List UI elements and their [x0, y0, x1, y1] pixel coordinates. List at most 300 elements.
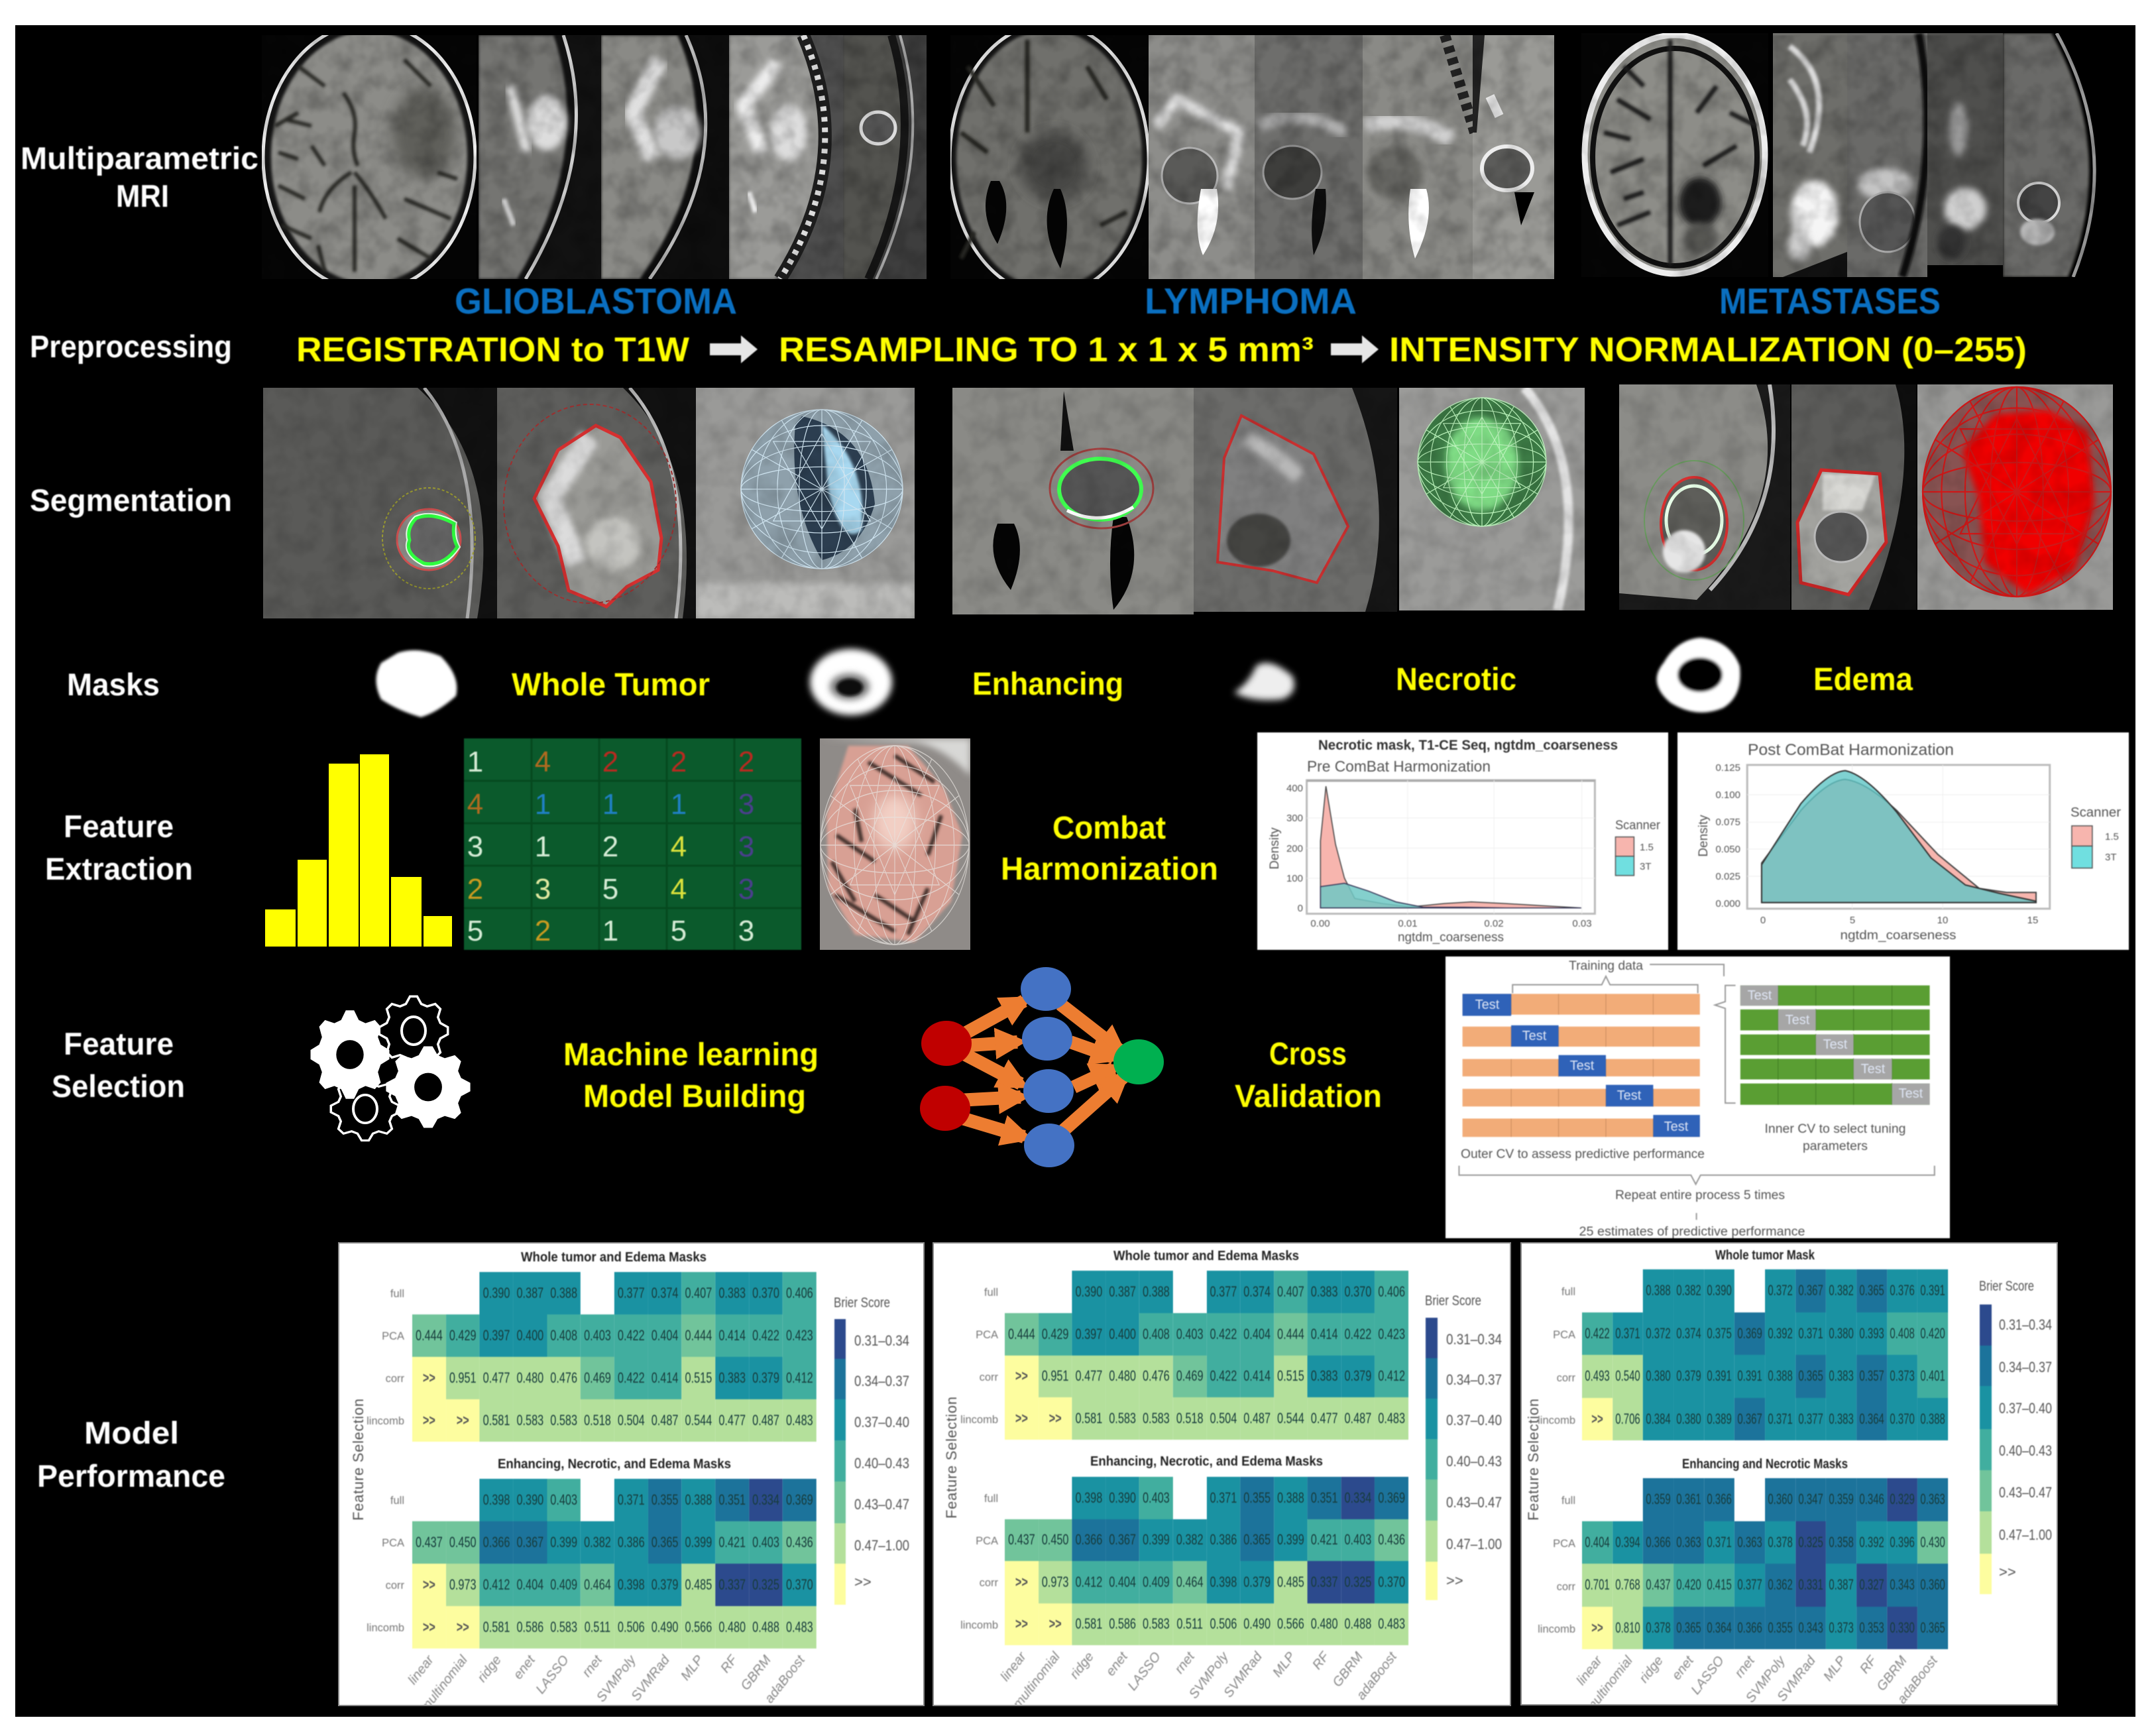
heatmap: enhancing, necrotic and edema masks: 0.398	[1210, 1574, 1237, 1590]
annotations: titles, axes and legend: full	[390, 1288, 404, 1300]
heatmap: enhancing, necrotic and edema masks: 0.355	[1243, 1489, 1271, 1506]
heatmap: whole tumor mask: 0.383	[1829, 1411, 1854, 1427]
heatmap: whole tumor and edema masks: 0.504	[1210, 1410, 1237, 1426]
chart: post ComBat density: 0.050	[1715, 844, 1740, 855]
heatmap: enhancing, necrotic and edema masks: 0.581	[483, 1619, 510, 1635]
heatmap: enhancing, necrotic and edema masks: 0.480	[718, 1619, 746, 1635]
heatmap: whole tumor mask: 0.364	[1859, 1411, 1884, 1427]
heatmap: enhancing, necrotic and edema masks: 0.388	[685, 1491, 712, 1508]
heatmap: whole tumor and edema masks: 0.487	[1243, 1410, 1271, 1426]
heatmap: whole tumor mask: 0.388	[1768, 1367, 1793, 1384]
heatmap: enhancing, necrotic and edema masks: 0.566	[1277, 1615, 1304, 1632]
heatmap: enhancing, necrotic and edema masks	[412, 1478, 817, 1649]
panel: heatmaps whole tumor and enhancing / necrotic (right)	[1522, 1244, 2057, 1704]
heatmap: enhancing, necrotic and edema masks: >>	[457, 1619, 469, 1635]
chart: gray-level matrix: 4	[467, 788, 483, 821]
image: glioblastoma FLAIR with contour	[497, 388, 696, 618]
annotations: titles, axes and legend: GBRM	[1874, 1653, 1910, 1694]
heatmap: whole tumor and edema masks: 0.444	[685, 1327, 712, 1344]
annotations: titles, axes and legend: 0.31–0.34	[854, 1332, 909, 1349]
annotations: titles, axes and legend: rnet	[1732, 1652, 1758, 1680]
heatmap: enhancing, necrotic and edema masks: 0.369	[1378, 1489, 1405, 1506]
heatmap: enhancing, necrotic and edema masks: 0.483	[786, 1619, 813, 1635]
annotations: titles, axes and legend: enet	[1104, 1649, 1131, 1679]
heatmap: enhancing, necrotic and edema masks: 0.367	[1109, 1531, 1136, 1548]
heatmap: enhancing, necrotic and edema masks: >>	[1049, 1615, 1062, 1632]
heatmap: enhancing, necrotic and edema masks: 0.371	[1210, 1489, 1237, 1506]
image: lymphoma T1 brain	[950, 35, 1149, 279]
heatmap: whole tumor and edema masks: 0.515	[685, 1369, 712, 1386]
heatmap: enhancing and necrotic masks: 0.437	[1646, 1576, 1671, 1593]
chart: gray-level matrix: 1	[602, 915, 618, 947]
chart: gray-level matrix: 3	[467, 831, 483, 863]
chart: pre ComBat density: 300	[1286, 813, 1303, 824]
label: Cross Validation	[1235, 1037, 1382, 1114]
label: Model Performance	[37, 1415, 225, 1493]
diagram: nested cross validation: Test	[1475, 998, 1500, 1012]
heatmap: enhancing, necrotic and edema masks: 0.583	[550, 1619, 577, 1635]
heatmap: enhancing, necrotic and edema masks: 0.586	[1109, 1615, 1136, 1632]
heatmap: whole tumor mask: 0.379	[1676, 1367, 1701, 1384]
heatmap: enhancing and necrotic masks: 0.392	[1859, 1534, 1884, 1550]
heatmap: enhancing and necrotic masks: 0.701	[1585, 1576, 1610, 1593]
annotations: titles, axes and legend: RF	[1310, 1649, 1333, 1672]
image: glioblastoma ADC slice	[729, 35, 843, 279]
icon: gears	[311, 996, 471, 1141]
heatmap: whole tumor mask: 0.493	[1585, 1367, 1610, 1384]
heatmap: enhancing and necrotic masks: >>	[1591, 1619, 1603, 1636]
image: lymphoma T1 contrast slice	[1473, 35, 1554, 279]
image: metastases T2 slice	[1773, 33, 1847, 277]
heatmap: whole tumor and edema masks: 0.397	[483, 1327, 510, 1344]
arrow: to normalization	[1331, 335, 1379, 363]
annotations: titles, axes and legend: linear	[405, 1652, 437, 1688]
chart: gray-level matrix: 1	[602, 788, 618, 821]
diagram: nested cross validation: 25 estimates of predictive performance	[1579, 1225, 1805, 1239]
image: glioblastoma T2 slice	[479, 35, 601, 279]
chart: pre ComBat density: 3T	[1640, 861, 1652, 872]
label: Model Performance: Model	[84, 1415, 179, 1450]
chart: pre ComBat density: 0	[1298, 903, 1303, 914]
heatmap: enhancing, necrotic and edema masks: 0.325	[1345, 1574, 1371, 1590]
annotations: titles, axes and legend: 0.34–0.37	[854, 1373, 909, 1389]
heatmap: whole tumor and edema masks: 0.408	[1143, 1326, 1170, 1342]
heatmap: whole tumor and edema masks: >>	[423, 1412, 435, 1428]
diagram: nested cross validation: Training data	[1569, 959, 1643, 973]
heatmap: whole tumor and edema masks: 0.374	[1243, 1283, 1271, 1300]
heatmap: enhancing, necrotic and edema masks: 0.398	[618, 1576, 645, 1593]
heatmap: whole tumor mask: 0.365	[1859, 1282, 1884, 1299]
image: lymphoma 3D render	[1399, 388, 1585, 610]
annotations: titles, axes and legend: enet	[1670, 1652, 1697, 1683]
heatmap: enhancing, necrotic and edema masks: 0.334	[1345, 1489, 1371, 1506]
image: glioblastoma T1 brain	[262, 23, 477, 291]
heatmap: whole tumor and edema masks: 0.422	[618, 1369, 645, 1386]
heatmap: whole tumor mask: 0.372	[1768, 1282, 1793, 1299]
annotations: titles, axes and legend: Whole tumor and Edema Masks	[521, 1250, 707, 1265]
diagram: nested cross validation: Test	[1617, 1088, 1642, 1103]
heatmap: enhancing, necrotic and edema masks: 0.369	[786, 1491, 813, 1508]
labels: tumor class names: GLIOBLASTOMA	[455, 280, 737, 321]
heatmap: enhancing and necrotic masks: 0.394	[1615, 1534, 1640, 1550]
annotations: titles, axes and legend: PCA	[976, 1535, 998, 1547]
heatmap: whole tumor and edema masks: 0.414	[1311, 1326, 1338, 1342]
heatmap: whole tumor mask: 0.367	[1798, 1282, 1823, 1299]
heatmap: enhancing, necrotic and edema masks: 0.404	[516, 1576, 543, 1593]
chart: gray-level matrix: 4	[671, 873, 687, 905]
heatmap: whole tumor and edema masks: 0.422	[618, 1327, 645, 1344]
heatmap: whole tumor and edema masks: 0.403	[1176, 1326, 1204, 1342]
chart: post ComBat density: 1.5	[2105, 831, 2119, 842]
row: preprocessing	[30, 329, 2027, 369]
chart: post ComBat density: 5	[1850, 915, 1855, 926]
heatmap: whole tumor and edema masks: 0.483	[1378, 1410, 1405, 1426]
annotations: titles, axes and legend: >>	[854, 1574, 872, 1590]
heatmap: enhancing and necrotic masks: 0.343	[1798, 1619, 1823, 1636]
annotations: titles, axes and legend: GBRM	[738, 1652, 774, 1693]
heatmap: whole tumor and edema masks: 0.387	[516, 1285, 543, 1301]
heatmap: enhancing and necrotic masks: 0.364	[1707, 1619, 1732, 1636]
chart: gray-level matrix: 5	[671, 915, 687, 947]
heatmap: enhancing and necrotic masks: 0.327	[1859, 1576, 1884, 1593]
heatmap: enhancing and necrotic masks: 0.346	[1859, 1491, 1884, 1507]
label: Necrotic: Necrotic	[1396, 662, 1516, 697]
heatmap: whole tumor mask: 0.380	[1676, 1411, 1701, 1427]
heatmap: whole tumor and edema masks: 0.477	[1076, 1367, 1102, 1384]
annotations: titles, axes and legend: lincomb	[1538, 1415, 1575, 1426]
heatmap: whole tumor mask: 0.391	[1737, 1367, 1762, 1384]
heatmap: whole tumor and edema masks: 0.422	[1210, 1367, 1237, 1384]
heatmap: enhancing and necrotic masks: 0.420	[1676, 1576, 1701, 1593]
heatmap: whole tumor mask: 0.384	[1646, 1411, 1671, 1427]
heatmap: enhancing, necrotic and edema masks: 0.403	[550, 1491, 577, 1508]
label: Whole Tumor: Whole Tumor	[512, 667, 710, 703]
image: metastases FLAIR with contour	[1791, 384, 1916, 610]
chart: post ComBat density: 0.075	[1715, 817, 1740, 828]
row: segmentation	[30, 384, 2113, 618]
heatmap: enhancing, necrotic and edema masks: >>	[423, 1619, 435, 1635]
heatmap: whole tumor and edema masks: 0.374	[652, 1285, 678, 1301]
diagram: nested cross validation: Repeat entire process 5 times	[1615, 1188, 1785, 1202]
chart: post ComBat density: 0.025	[1715, 871, 1740, 882]
heatmap: enhancing and necrotic masks: 0.378	[1768, 1534, 1793, 1550]
heatmap: whole tumor and edema masks: >>	[1015, 1410, 1028, 1426]
annotations: titles, axes and legend: 0.40–0.43	[854, 1455, 909, 1472]
heatmap: whole tumor and edema masks: 0.581	[483, 1412, 510, 1428]
chart: gray-level matrix: 2	[467, 873, 483, 905]
heatmap: whole tumor mask: 0.371	[1768, 1411, 1793, 1427]
labels: tumor class names	[455, 280, 1941, 321]
annotations: titles, axes and legend: corr	[980, 1577, 998, 1589]
heatmap: whole tumor and edema masks: 0.429	[449, 1327, 477, 1344]
annotations: titles, axes and legend: SVMRad	[628, 1652, 673, 1704]
heatmap: whole tumor and edema masks: 0.422	[1210, 1326, 1237, 1342]
heatmap: whole tumor and edema masks: 0.377	[618, 1285, 645, 1301]
label: Preprocessing: Preprocessing	[30, 329, 232, 364]
chart: pre ComBat density: Scanner	[1615, 819, 1661, 833]
annotations: titles, axes and legend: RF	[718, 1652, 741, 1676]
heatmap: whole tumor mask: 0.388	[1920, 1411, 1945, 1427]
chart: pre ComBat density: ngtdm_coarseness	[1398, 931, 1504, 945]
chart: pre ComBat density: 400	[1286, 783, 1303, 794]
heatmap: enhancing, necrotic and edema masks: 0.390	[1109, 1489, 1136, 1506]
label: Feature Extraction: Extraction	[45, 851, 193, 886]
heatmap: enhancing, necrotic and edema masks: >>	[1015, 1574, 1028, 1590]
chart: pre ComBat density: 200	[1286, 843, 1303, 854]
heatmap: whole tumor and edema masks: 0.412	[1378, 1367, 1405, 1384]
heatmap: enhancing, necrotic and edema masks: 0.480	[1311, 1615, 1338, 1632]
heatmap: whole tumor mask: 0.391	[1920, 1282, 1945, 1299]
diagram: nested cross validation: Test	[1664, 1120, 1689, 1134]
image: metastases T1 contrast slice	[2003, 33, 2106, 277]
chart: pre ComBat density: 1.5	[1640, 842, 1654, 853]
heatmap: enhancing and necrotic masks: 0.347	[1798, 1491, 1823, 1507]
heatmap: enhancing, necrotic and edema masks: 0.390	[516, 1491, 543, 1508]
label: Multiparametric MRI: Multiparametric	[21, 141, 258, 176]
heatmap: enhancing, necrotic and edema masks: 0.403	[1143, 1489, 1170, 1506]
heatmap: whole tumor mask: 0.357	[1859, 1367, 1884, 1384]
annotations: titles, axes and legend: RF	[1857, 1652, 1880, 1676]
heatmap: whole tumor and edema masks: 0.404	[1243, 1326, 1271, 1342]
heatmap: whole tumor and edema masks: 0.414	[718, 1327, 746, 1344]
heatmap: enhancing and necrotic masks: 0.325	[1798, 1534, 1823, 1550]
annotations: titles, axes and legend: Feature Selection	[943, 1397, 960, 1519]
heatmap: whole tumor and edema masks: 0.422	[1345, 1326, 1371, 1342]
chart: gray-level matrix: 3	[738, 873, 754, 905]
image: metastases T1 brain	[1581, 33, 1768, 277]
annotations: titles, axes and legend	[1525, 1248, 2052, 1704]
chart: yellow histogram	[265, 754, 452, 947]
label: Model Performance: Performance	[37, 1458, 225, 1493]
mask: whole tumor blob	[376, 650, 457, 717]
heatmap: enhancing, necrotic and edema masks: 0.583	[1143, 1615, 1170, 1632]
heatmap: enhancing, necrotic and edema masks: 0.386	[618, 1534, 645, 1550]
heatmap: enhancing, necrotic and edema masks: 0.973	[449, 1576, 477, 1593]
heatmap: enhancing, necrotic and edema masks: 0.450	[1042, 1531, 1068, 1548]
heatmap: enhancing, necrotic and edema masks: 0.483	[1378, 1615, 1405, 1632]
heatmap: enhancing, necrotic and edema masks: 0.366	[1076, 1531, 1102, 1548]
diagram: nested cross validation: Test	[1748, 988, 1772, 1003]
heatmap: whole tumor mask: 0.422	[1585, 1325, 1610, 1342]
chart: gray-level matrix: 1	[671, 788, 687, 821]
heatmap: enhancing, necrotic and edema masks: 0.566	[685, 1619, 712, 1635]
label: Multiparametric MRI: MRI	[116, 178, 169, 213]
annotations: titles, axes and legend: full	[390, 1495, 404, 1507]
heatmap: enhancing, necrotic and edema masks: 0.973	[1042, 1574, 1068, 1590]
heatmap: whole tumor and edema masks: 0.515	[1277, 1367, 1304, 1384]
heatmap: enhancing, necrotic and edema masks: 0.464	[584, 1576, 611, 1593]
image: metastases contrast with contours	[1619, 384, 1790, 610]
annotations: titles, axes and legend: linear	[997, 1649, 1030, 1684]
labels: tumor class names: METASTASES	[1719, 280, 1941, 321]
heatmap: enhancing, necrotic and edema masks: 0.436	[1378, 1531, 1405, 1548]
annotations: titles, axes and legend: SVMPoly	[594, 1652, 640, 1705]
heatmap: whole tumor and edema masks: 0.469	[1176, 1367, 1204, 1384]
chart: pre ComBat density: 0.03	[1572, 918, 1592, 929]
chart: pre ComBat density: Necrotic mask, T1-CE Seq, ngtdm_coarseness	[1318, 738, 1618, 753]
chart: post ComBat density: 0.000	[1715, 898, 1740, 909]
heatmap: enhancing and necrotic masks: 0.373	[1829, 1619, 1854, 1636]
diagram: nested cross validation: Test	[1899, 1086, 1923, 1101]
heatmap: enhancing and necrotic masks: 0.360	[1768, 1491, 1793, 1507]
annotations: titles, axes and legend: lincomb	[960, 1414, 998, 1426]
diagram: nested cross validation: Test	[1570, 1059, 1595, 1073]
label: Feature Selection	[52, 1026, 185, 1104]
heatmap: enhancing, necrotic and edema masks: 0.421	[718, 1534, 746, 1550]
annotations: titles, axes and legend: SVMPoly	[1186, 1649, 1232, 1702]
heatmap: enhancing and necrotic masks	[1581, 1477, 1949, 1650]
heatmap: whole tumor and edema masks: 0.414	[1243, 1367, 1271, 1384]
label: Feature Selection: Selection	[52, 1069, 185, 1104]
annotations: titles, axes and legend: MLP	[678, 1652, 707, 1683]
heatmap: enhancing, necrotic and edema masks: 0.365	[1243, 1531, 1271, 1548]
annotations: titles, axes and legend: Feature Selection	[1525, 1399, 1542, 1521]
heatmap: whole tumor mask: 0.401	[1920, 1367, 1945, 1384]
heatmap: enhancing, necrotic and edema masks: 0.409	[550, 1576, 577, 1593]
annotations: titles, axes and legend: 0.37–0.40	[854, 1414, 909, 1430]
label: Machine learning Model Building	[563, 1037, 819, 1114]
label: Combat Harmonization: Harmonization	[1001, 852, 1218, 887]
heatmap: whole tumor mask: 0.372	[1646, 1325, 1671, 1342]
heatmap: whole tumor and edema masks: 0.583	[516, 1412, 543, 1428]
annotations: titles, axes and legend: Brier Score	[834, 1295, 890, 1310]
heatmap: enhancing, necrotic and edema masks: 0.367	[516, 1534, 543, 1550]
heatmap: whole tumor and edema masks: 0.583	[550, 1412, 577, 1428]
diagram: neural network	[920, 967, 1164, 1167]
heatmap: enhancing, necrotic and edema masks: 0.436	[786, 1534, 813, 1550]
heatmap: whole tumor and edema masks: 0.487	[1345, 1410, 1371, 1426]
heatmap: whole tumor and edema masks: 0.429	[1042, 1326, 1068, 1342]
diagram: nested cross validation: Outer CV to assess predictive performance	[1461, 1147, 1705, 1161]
heatmap: whole tumor mask: 0.371	[1615, 1325, 1640, 1342]
heatmap: enhancing, necrotic and edema masks: 0.464	[1176, 1574, 1204, 1590]
heatmap: whole tumor and edema masks: 0.390	[483, 1285, 510, 1301]
heatmap: whole tumor and edema masks: 0.403	[584, 1327, 611, 1344]
heatmap: enhancing and necrotic masks: 0.365	[1920, 1619, 1945, 1636]
image: lymphoma contrast with contours	[952, 388, 1194, 614]
heatmap: whole tumor and edema masks: 0.583	[1143, 1410, 1170, 1426]
heatmap: enhancing, necrotic and edema masks: 0.506	[618, 1619, 645, 1635]
annotations: titles, axes and legend: PCA	[1553, 1329, 1575, 1341]
annotations: titles, axes and legend: full	[984, 1287, 998, 1299]
heatmap: enhancing, necrotic and edema masks: 0.370	[786, 1576, 813, 1593]
heatmap: whole tumor and edema masks: 0.422	[752, 1327, 779, 1344]
heatmap: enhancing, necrotic and edema masks: 0.371	[618, 1491, 645, 1508]
heatmap: whole tumor and edema masks: 0.444	[416, 1327, 443, 1344]
row: feature extraction	[45, 738, 1218, 950]
heatmap: enhancing, necrotic and edema masks: 0.403	[1345, 1531, 1371, 1548]
heatmap: whole tumor and edema masks: 0.387	[1109, 1283, 1136, 1300]
heatmap: whole tumor and edema masks: 0.477	[1311, 1410, 1338, 1426]
image: lymphoma ADC slice	[1363, 35, 1475, 279]
diagram: nested cross validation	[1446, 956, 1950, 1239]
annotations: titles, axes and legend: lincomb	[367, 1622, 404, 1634]
heatmap: enhancing, necrotic and edema masks: >>	[423, 1576, 435, 1593]
chart: gray-level matrix: 2	[602, 746, 618, 778]
annotations: titles, axes and legend	[943, 1249, 1502, 1705]
chart: post ComBat density: ngtdm_coarseness	[1840, 929, 1957, 943]
heatmap: enhancing and necrotic masks: 0.363	[1920, 1491, 1945, 1507]
heatmap: enhancing, necrotic and edema masks: 0.437	[416, 1534, 443, 1550]
annotations: titles, axes and legend: PCA	[1553, 1538, 1575, 1550]
annotations: titles, axes and legend: 0.43–0.47	[1446, 1494, 1502, 1511]
heatmap: enhancing, necrotic and edema masks: 0.412	[483, 1576, 510, 1593]
heatmap: whole tumor mask: 0.383	[1829, 1367, 1854, 1384]
heatmap: enhancing and necrotic masks: 0.810	[1615, 1619, 1640, 1636]
chart: pre ComBat density: 100	[1286, 873, 1303, 884]
heatmap: enhancing and necrotic masks: 0.365	[1676, 1619, 1701, 1636]
heatmap: enhancing, necrotic and edema masks: 0.421	[1311, 1531, 1338, 1548]
diagram: nested cross validation: Test	[1861, 1062, 1886, 1076]
heatmap: whole tumor and edema masks: 0.951	[1042, 1367, 1068, 1384]
heatmap: whole tumor and edema masks: 0.388	[550, 1285, 577, 1301]
heatmap: enhancing, necrotic and edema masks: 0.404	[1109, 1574, 1136, 1590]
annotations: titles, axes and legend: rnet	[579, 1652, 606, 1680]
annotations: titles, axes and legend: GBRM	[1330, 1649, 1366, 1690]
image: lymphoma FLAIR slice	[1255, 35, 1363, 279]
heatmap: whole tumor mask: 0.380	[1646, 1367, 1671, 1384]
heatmap: whole tumor and edema masks: 0.544	[1277, 1410, 1304, 1426]
annotations: titles, axes and legend: ridge	[1067, 1650, 1097, 1682]
label: Cross Validation: Cross	[1269, 1037, 1347, 1072]
annotations: titles, axes and legend: Enhancing, Necrotic, and Edema Masks	[1090, 1454, 1323, 1469]
annotations: titles, axes and legend: >>	[1446, 1572, 1463, 1589]
heatmap: whole tumor and edema masks: >>	[1015, 1367, 1028, 1384]
label: Edema: Edema	[1813, 662, 1913, 697]
annotations: titles, axes and legend: adaBoost	[762, 1652, 809, 1705]
image: metastases FLAIR slice	[1847, 33, 1927, 277]
annotations: titles, axes and legend: corr	[1557, 1581, 1575, 1593]
panel: heatmaps whole tumor / edema and enhancing / necrotic / edema (left)	[339, 1244, 923, 1705]
label: Cross Validation: Validation	[1235, 1079, 1382, 1114]
chart: post ComBat density: 10	[1937, 915, 1948, 926]
annotations: titles, axes and legend: SVMRad	[1221, 1649, 1265, 1700]
heatmap: enhancing, necrotic and edema masks: 0.355	[652, 1491, 678, 1508]
heatmap: enhancing and necrotic masks: 0.366	[1646, 1534, 1671, 1550]
heatmap: enhancing, necrotic and edema masks: 0.485	[685, 1576, 712, 1593]
heatmap: whole tumor and edema masks: 0.407	[1277, 1283, 1304, 1300]
heatmap: whole tumor and edema masks: 0.480	[516, 1369, 543, 1386]
heatmap: enhancing, necrotic and edema masks: 0.334	[752, 1491, 779, 1508]
heatmap: whole tumor mask: 0.540	[1615, 1367, 1640, 1384]
heatmap: enhancing, necrotic and edema masks: 0.399	[550, 1534, 577, 1550]
chart: gray-level matrix: 2	[602, 831, 618, 863]
chart: gray-level matrix: 1	[535, 788, 551, 821]
chart: post ComBat density: 0.100	[1715, 789, 1740, 801]
chart: gray-level matrix: 3	[738, 788, 754, 821]
annotations: titles, axes and legend: PCA	[976, 1329, 998, 1341]
heatmap: whole tumor and edema masks: 0.383	[718, 1285, 746, 1301]
heatmap: whole tumor mask: 0.375	[1707, 1325, 1732, 1342]
annotations: titles, axes and legend: ridge	[475, 1653, 504, 1685]
chart: post ComBat density: Density	[1697, 815, 1711, 857]
heatmap: whole tumor and edema masks: 0.444	[1277, 1326, 1304, 1342]
heatmap: whole tumor and edema masks: 0.583	[1109, 1410, 1136, 1426]
row: multiparametric MRI	[22, 33, 2096, 279]
chart: gray-level matrix: 3	[738, 831, 754, 863]
heatmap: whole tumor mask: 0.382	[1829, 1282, 1854, 1299]
heatmap: whole tumor and edema masks: 0.406	[786, 1285, 813, 1301]
step: intensity normalization: INTENSITY NORMALIZATION (0–255)	[1389, 331, 2027, 369]
annotations: titles, axes and legend: Brier Score	[1425, 1293, 1481, 1308]
chart: gray-level matrix: 2	[535, 915, 551, 947]
diagram: nested cross validation: Test	[1823, 1037, 1848, 1052]
heatmap: whole tumor mask: 0.389	[1707, 1411, 1732, 1427]
annotations: titles, axes and legend: corr	[386, 1373, 404, 1385]
annotations: titles, axes and legend: corr	[1557, 1372, 1575, 1384]
heatmap: whole tumor and edema masks: 0.951	[449, 1369, 477, 1386]
heatmap: whole tumor and edema masks: 0.518	[1176, 1410, 1204, 1426]
